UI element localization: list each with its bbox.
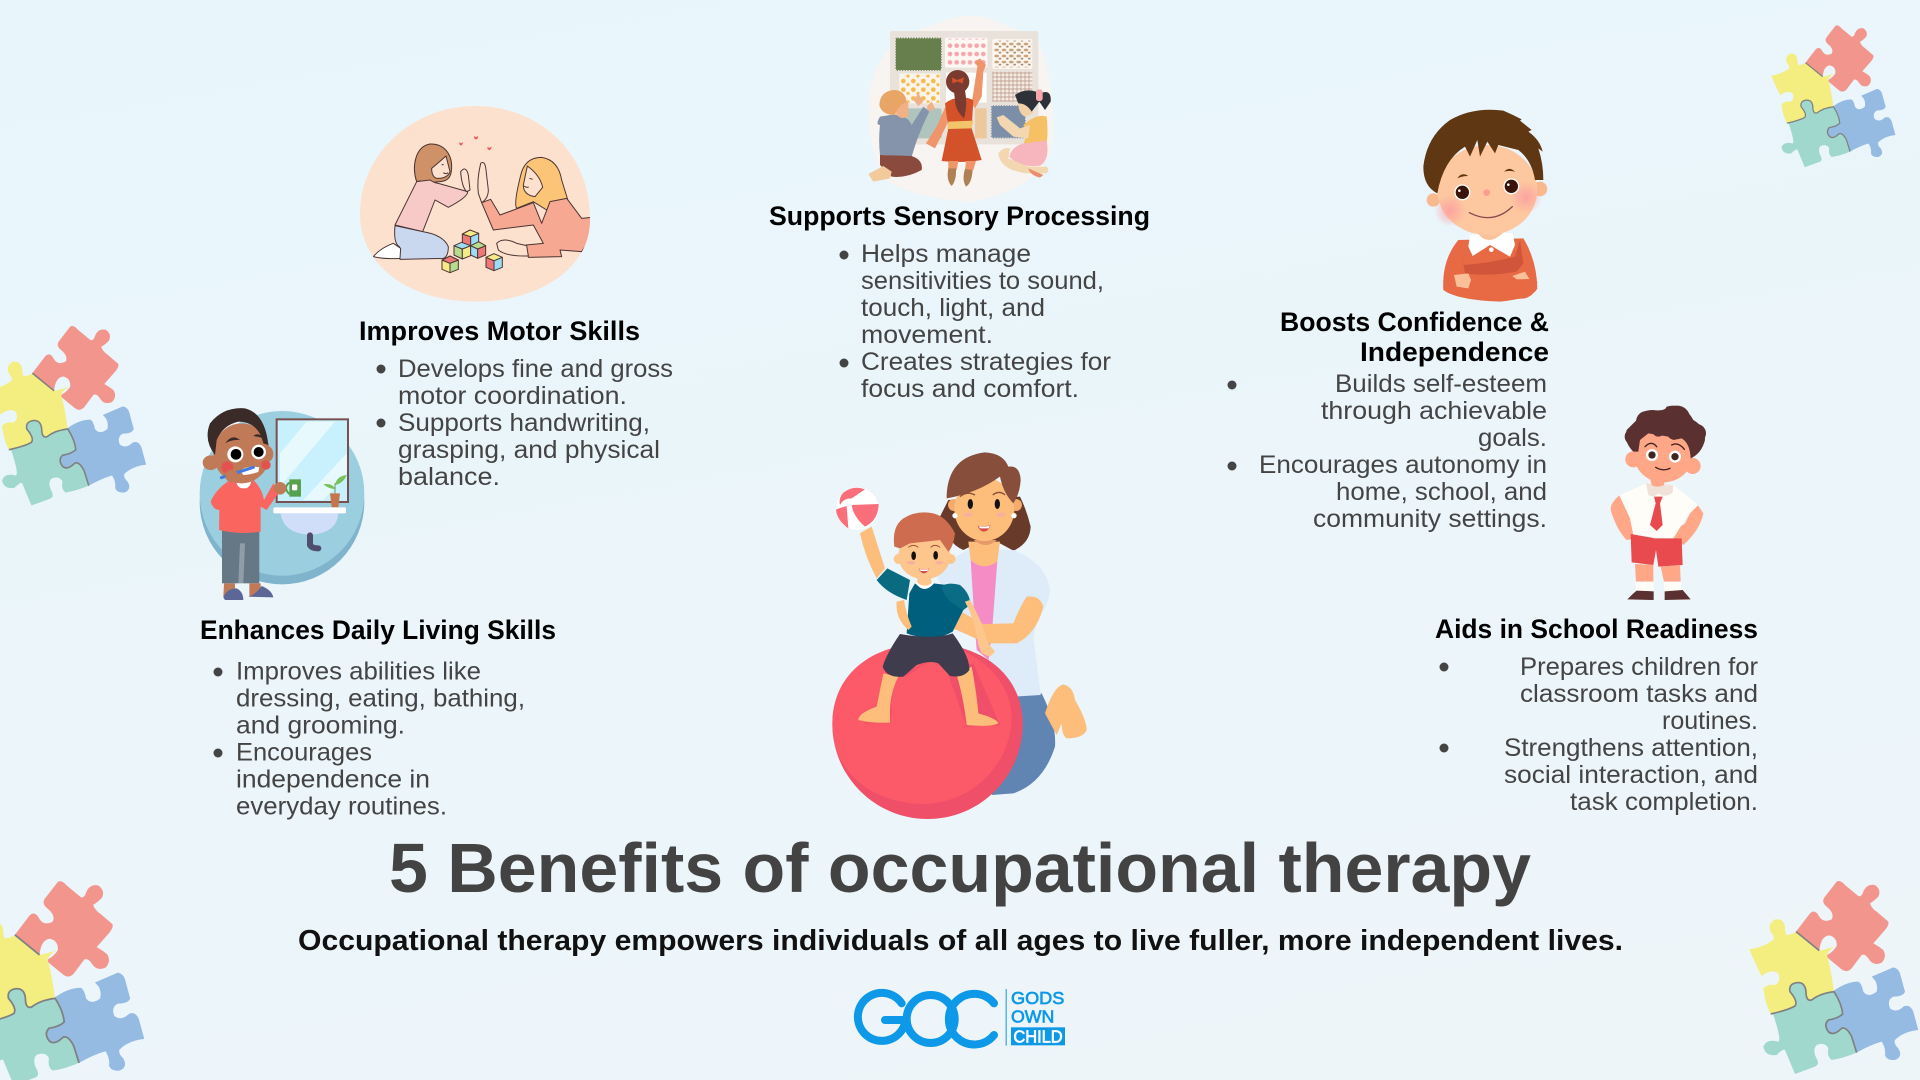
- illustration: child and woman high five: [360, 106, 592, 302]
- heading and list: Aids in School Readiness: Strengthens attention,: [1504, 734, 1758, 762]
- puzzle: left middle: [0, 326, 146, 506]
- heading and list: Improves Motor Skills: Supports handwriting,: [398, 409, 650, 437]
- heading and list: Supports Sensory Processing: [769, 201, 1150, 403]
- heading and list: Boosts Confidence and Independence: Independence: [1360, 337, 1549, 367]
- heading and list: Boosts Confidence and Independence: community settings.: [1313, 505, 1547, 533]
- heading and list: Aids in School Readiness: task completion.: [1570, 788, 1758, 816]
- heading and list: Boosts Confidence and Independence: through achievable: [1321, 397, 1547, 425]
- heading and list: Improves Motor Skills: Improves Motor Skills: [359, 316, 640, 346]
- heading and list: Supports Sensory Processing: Creates strategies for: [861, 348, 1111, 376]
- illustration: confident boy with folded arms: [1423, 110, 1547, 302]
- heading and list: Aids in School Readiness: social interaction, and: [1504, 761, 1758, 789]
- heading and list: Supports Sensory Processing: Helps manage: [861, 240, 1031, 268]
- heading and list: Boosts Confidence and Independence: Builds self-esteem: [1335, 370, 1547, 398]
- heading and list: Supports Sensory Processing: focus and comfort.: [861, 375, 1079, 403]
- illustration: therapist with child on exercise ball: [832, 452, 1087, 819]
- illustration: boy brushing teeth: [200, 408, 364, 600]
- heading and list: Boosts Confidence and Independence: Encourages autonomy in: [1259, 451, 1547, 479]
- heading and list: Supports Sensory Processing: movement.: [861, 321, 993, 349]
- heading and list: Boosts Confidence and Independence: [1228, 307, 1549, 533]
- heading and list: Enhances Daily Living Skills: Encourages: [236, 738, 372, 766]
- heading and list: Aids in School Readiness: [1435, 614, 1758, 816]
- heading and list: Aids in School Readiness: classroom tasks and: [1520, 680, 1758, 708]
- heading and list: Enhances Daily Living Skills: dressing, eating, bathing,: [236, 684, 525, 712]
- puzzle: bottom right: [1749, 881, 1918, 1074]
- heading and list: Improves Motor Skills: [359, 316, 673, 491]
- heading and list: Improves Motor Skills: Develops fine and gross: [398, 355, 673, 383]
- heading and list: Aids in School Readiness: Aids in School Readiness: [1435, 614, 1758, 644]
- heading and list: Improves Motor Skills: motor coordination.: [398, 382, 627, 410]
- heading and list: Improves Motor Skills: balance.: [398, 463, 500, 491]
- heading and list: Supports Sensory Processing: Supports Sensory Processing: [769, 201, 1150, 231]
- logo: Gods Own Child: OWN: [1011, 1007, 1054, 1027]
- logo: Gods Own Child: CHILD: [1013, 1026, 1063, 1046]
- puzzle: bottom left: [0, 881, 144, 1080]
- tagline: Occupational therapy empowers individuals of all ages to live fuller, more independent lives.: [298, 925, 1623, 957]
- title: 5 Benefits of occupational therapy: [389, 829, 1531, 907]
- logo: Gods Own Child: GODS: [1011, 988, 1064, 1008]
- heading and list: Boosts Confidence and Independence: goals.: [1478, 424, 1547, 452]
- puzzle: top right: [1771, 25, 1895, 167]
- heading and list: Enhances Daily Living Skills: and grooming.: [236, 712, 405, 740]
- heading and list: Supports Sensory Processing: sensitivities to sound,: [861, 267, 1104, 295]
- heading and list: Boosts Confidence and Independence: Boosts Confidence &: [1280, 307, 1549, 337]
- heading and list: Improves Motor Skills: grasping, and physical: [398, 436, 660, 464]
- heading and list: Enhances Daily Living Skills: everyday routines.: [236, 792, 447, 820]
- heading and list: Enhances Daily Living Skills: Improves abilities like: [236, 658, 481, 686]
- heading and list: Enhances Daily Living Skills: independence in: [236, 766, 430, 794]
- heading and list: Enhances Daily Living Skills: [200, 615, 556, 820]
- heading and list: Aids in School Readiness: routines.: [1662, 707, 1758, 735]
- heading and list: Enhances Daily Living Skills: Enhances Daily Living Skills: [200, 615, 556, 645]
- heading and list: Boosts Confidence and Independence: home, school, and: [1336, 478, 1547, 506]
- illustration: children at sensory wall: [868, 16, 1053, 202]
- illustration: schoolboy in uniform: [1611, 406, 1706, 600]
- logo: Gods Own Child: [858, 988, 1065, 1046]
- heading and list: Supports Sensory Processing: touch, light, and: [861, 294, 1045, 322]
- heading and list: Aids in School Readiness: Prepares children for: [1520, 653, 1758, 681]
